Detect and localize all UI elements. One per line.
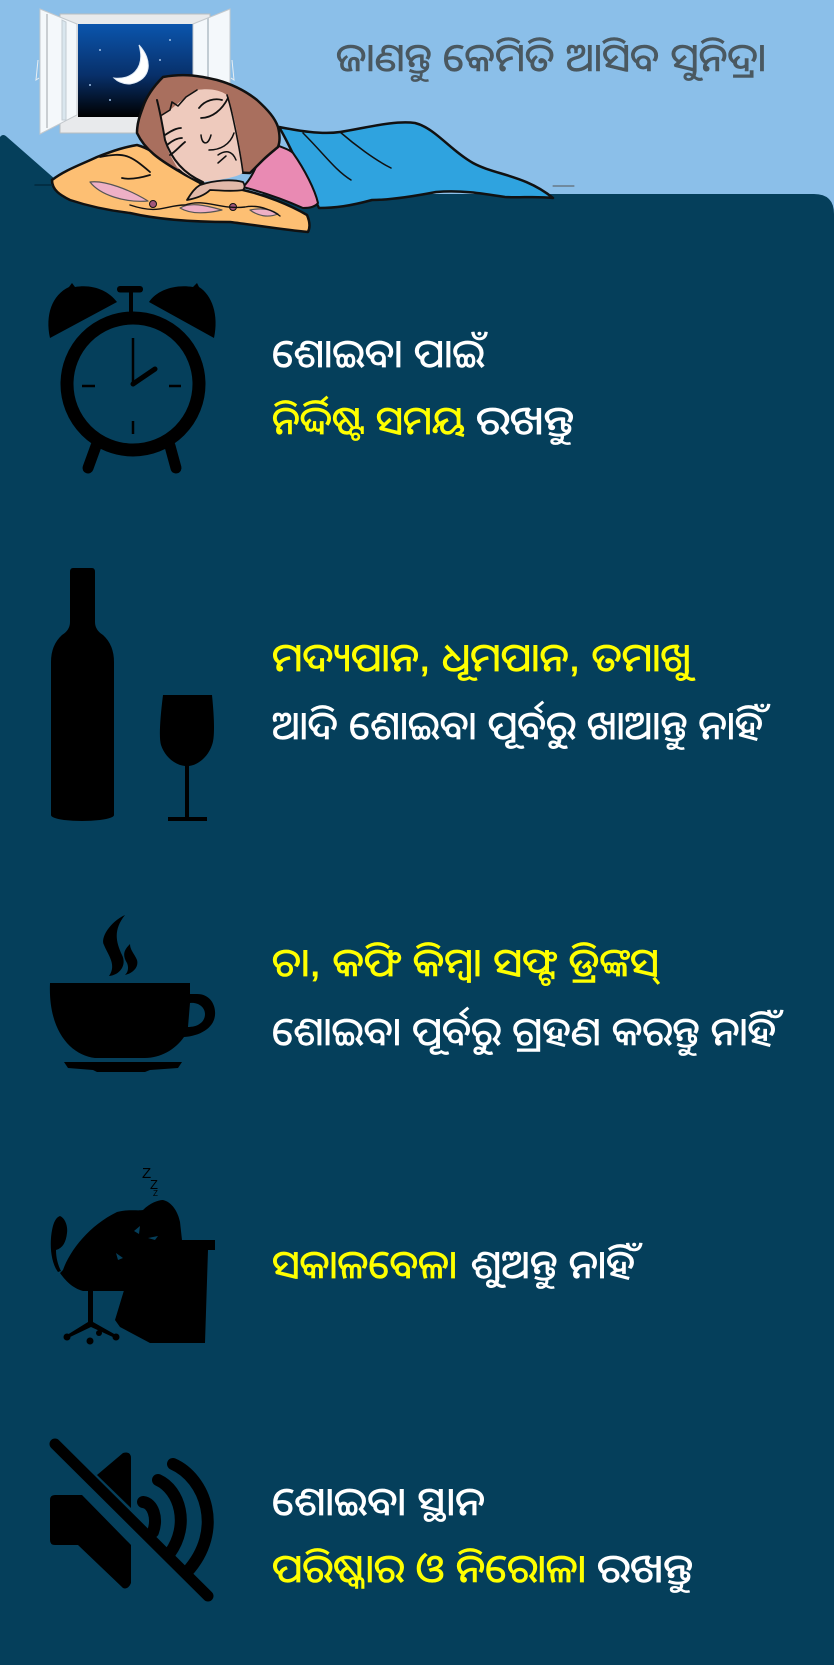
text: item 2: ମଦ୍ୟପାନ, ଧୂମପାନ, ତମାଖୁ xyxy=(272,637,696,681)
text: item 1: ନିର୍ଦ୍ଦିଷ୍ଟ ସମୟ xyxy=(272,396,465,443)
icon: coffee cup with steam xyxy=(50,915,215,1072)
icon: person asleep at desk: Z xyxy=(150,1177,158,1192)
window with night sky and moon xyxy=(36,9,234,134)
text: item 3: ଚା, କଫି କିମ୍ବା ସଫ୍ଟ ଡ୍ରିଙ୍କସ୍ xyxy=(272,942,660,986)
text: item 4: ସକାଳବେଳା xyxy=(272,1244,457,1287)
icon: person asleep at desk: Z xyxy=(153,1189,158,1198)
text: item 2 xyxy=(272,637,771,750)
text: item 1 xyxy=(272,332,574,445)
pillow xyxy=(52,145,309,232)
blanket xyxy=(279,122,553,208)
illustration: sleeping woman xyxy=(35,75,574,232)
hair xyxy=(137,75,280,173)
text: item 4 xyxy=(272,1243,643,1289)
arm xyxy=(187,180,244,200)
text: item 1: ଶୋଇବା ପାଇଁ xyxy=(272,332,488,376)
text: item 3: ଶୋଇବା ପୂର୍ବରୁ ଗ୍ରହଣ କରନ୍ତୁ ନାହିଁ xyxy=(272,1007,784,1056)
icon: person asleep at desk: Z xyxy=(142,1165,151,1182)
title: ଜାଣନ୍ତୁ କେମିତି ଆସିବ ସୁନିଦ୍ରା xyxy=(336,37,766,82)
text: item 2: ଆଦି ଶୋଇବା ପୂର୍ବରୁ ଖାଆନ୍ତୁ ନାହିଁ xyxy=(272,701,771,750)
shirt xyxy=(243,140,318,208)
text: item 4: ଶୁଅନ୍ତୁ ନାହିଁ xyxy=(471,1243,643,1289)
text: item 3 xyxy=(272,942,784,1056)
face xyxy=(162,89,243,182)
text: item 5: ପରିଷ୍କାର ଓ ନିରୋଳା xyxy=(272,1548,586,1591)
text: item 1: ରଖନ୍ତୁ xyxy=(476,400,574,445)
text: item 5 xyxy=(272,1481,693,1593)
icon: muted speaker xyxy=(50,1444,208,1596)
text: item 5: ଶୋଇବା ସ୍ଥାନ xyxy=(272,1481,485,1524)
icon: wine bottle and glass xyxy=(51,568,214,821)
icon: alarm clock xyxy=(48,283,216,468)
text: item 5: ରଖନ୍ତୁ xyxy=(597,1548,693,1593)
icon: person asleep at desk xyxy=(51,1165,215,1344)
